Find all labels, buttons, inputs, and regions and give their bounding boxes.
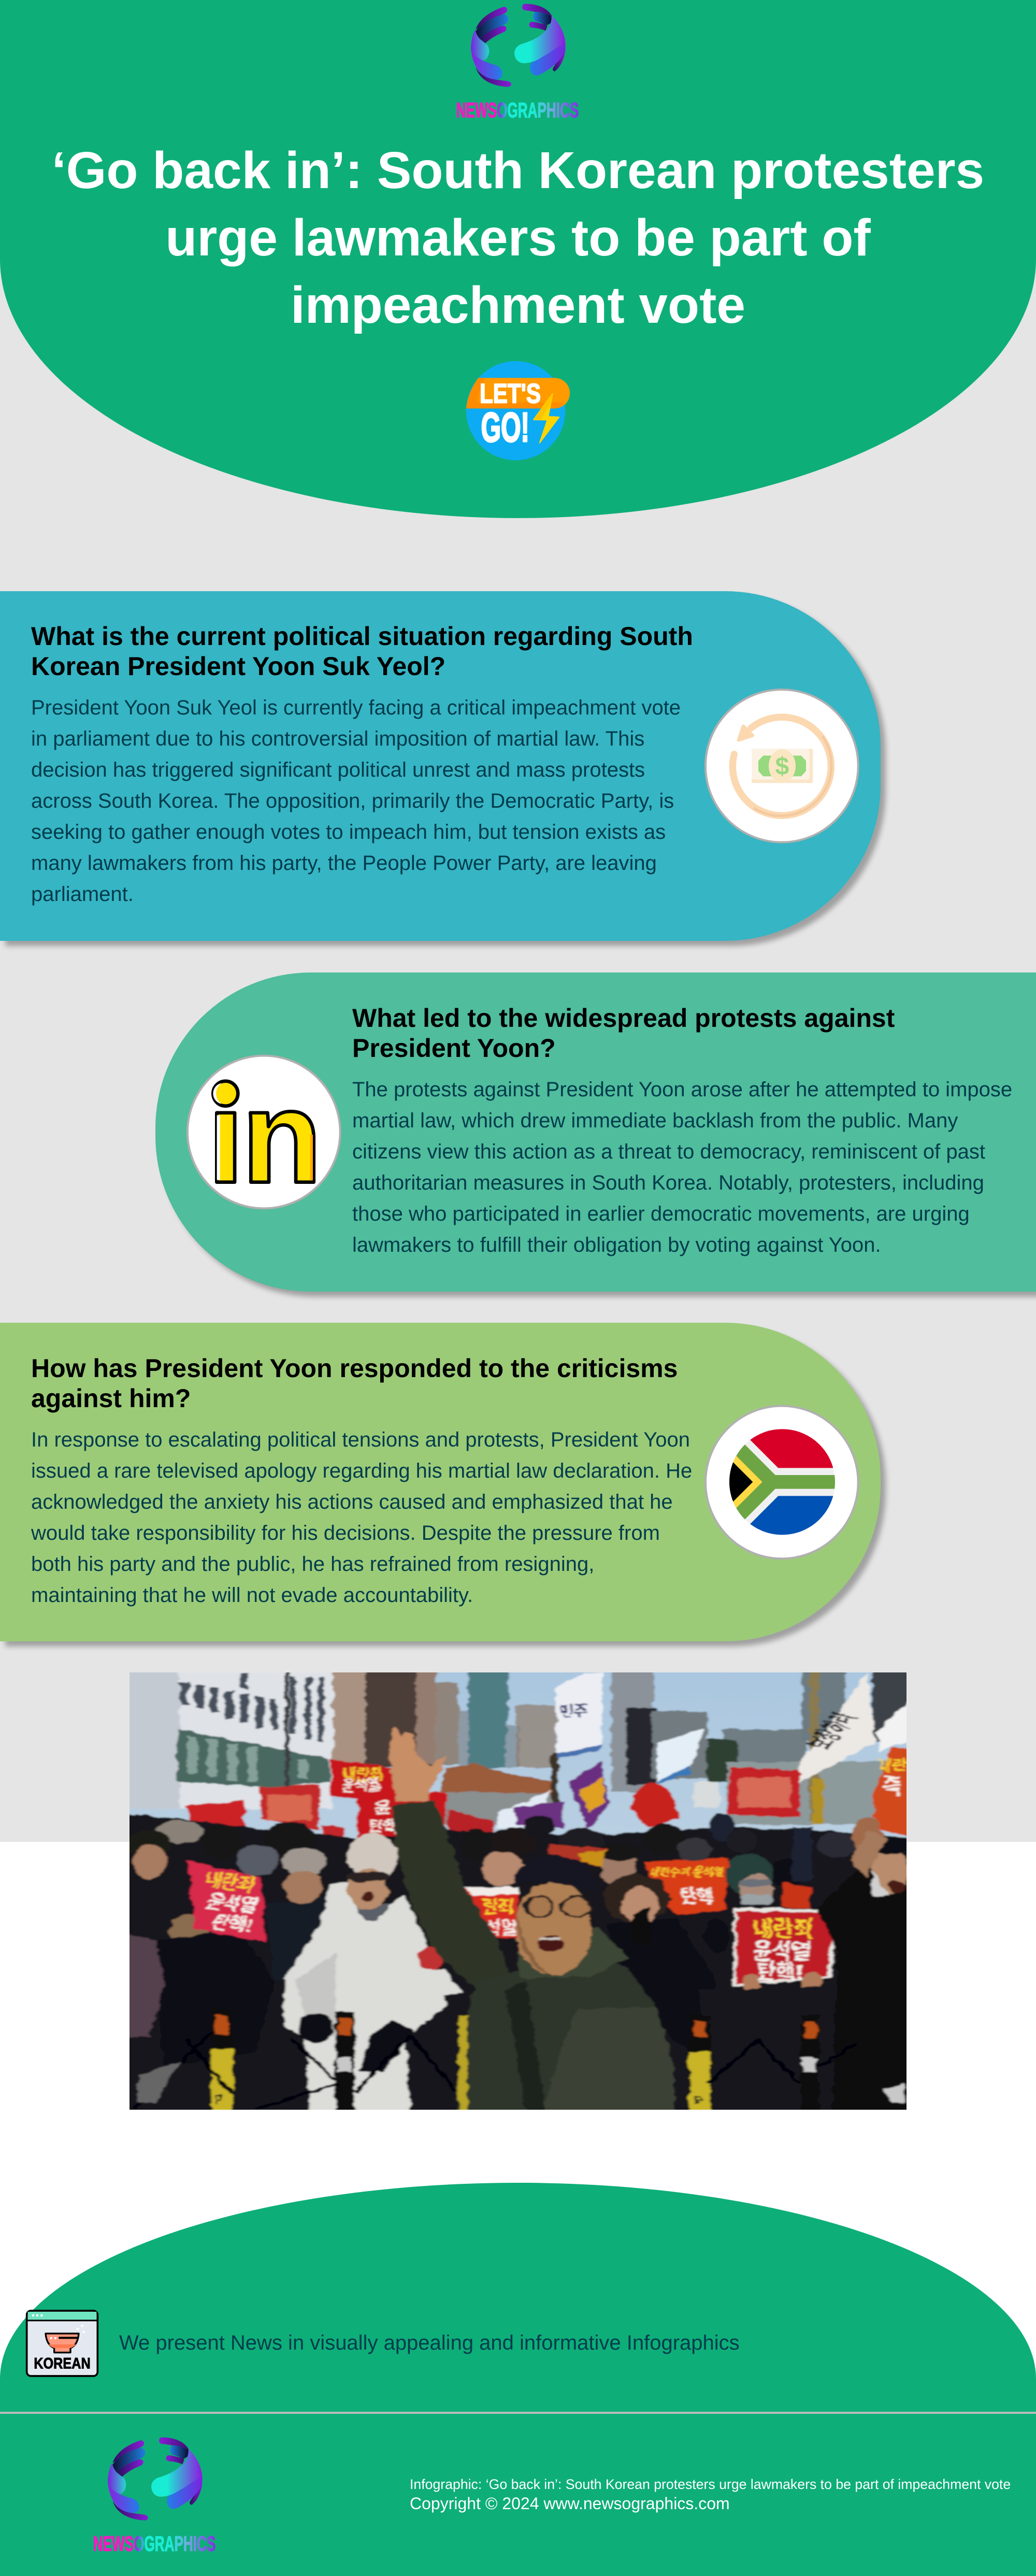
person with grey beanie <box>266 1847 328 1981</box>
heading: question 2: What led to the widespread protests against <box>352 1004 895 1033</box>
trees <box>441 1705 558 1813</box>
panel: Yoon's response <box>0 1323 881 1641</box>
text block: answer 1: many lawmakers from his party, the People Power Party, are leaving <box>31 852 657 875</box>
woman with dark hair <box>603 1874 717 2052</box>
title: urge lawmakers to be part of <box>165 209 871 267</box>
text block: answer 2: lawmakers to fulfill their obligation by voting against Yoon. <box>352 1234 881 1256</box>
person in white jacket <box>284 1833 445 2114</box>
text block: answer 2: martial law, which drew immediate backlash from the public. Many <box>352 1109 958 1132</box>
man at right edge <box>817 1830 913 2114</box>
background red signs: 즉 <box>883 1774 902 1798</box>
logo: Newsographics footer: NEWSOGRAPHICS <box>93 2532 215 2556</box>
logo: Newsographics header <box>456 4 579 122</box>
crowd mass <box>124 1813 913 2114</box>
barriers: P <box>694 2093 703 2108</box>
heading: question 2: President Yoon? <box>352 1034 556 1063</box>
heading: question 1: What is the current political situation regarding South <box>31 622 693 651</box>
flags: 민주 <box>560 1703 587 1720</box>
buildings <box>124 1668 913 1825</box>
icon: korean bowl: KOREAN <box>34 2355 91 2372</box>
background red signs <box>187 1748 913 1850</box>
text block: answer 1 <box>31 696 681 906</box>
logo: Newsographics footer <box>93 2437 215 2556</box>
icon: let's go badge <box>466 361 570 460</box>
footer panel: base <box>0 2412 1036 2576</box>
panel: what led to the protests <box>155 972 1036 1292</box>
text block: answer 1: seeking to gather enough votes to impeach him, but tension exists as <box>31 821 666 843</box>
icon: money cycle <box>704 689 859 843</box>
text block: answer 1: parliament. <box>31 883 134 906</box>
flags: 보장하라 <box>802 1710 864 1752</box>
heading: question 3: How has President Yoon responded to the criticisms <box>31 1354 678 1383</box>
photo: protesters with signs <box>130 1672 906 2110</box>
text block: answer 3 <box>31 1428 692 1607</box>
heading: question 1: Korean President Yoon Suk Yeol? <box>31 652 445 681</box>
barriers <box>132 2009 905 2114</box>
text block: answer 2: authoritarian measures in South Korea. Notably, protesters, including <box>352 1171 984 1194</box>
left person with pink sign: 내란죄 <box>202 1869 258 1896</box>
background red signs: 윤석열 <box>341 1777 380 1794</box>
title: impeachment vote <box>291 276 745 334</box>
heading: question 2 <box>352 1004 895 1063</box>
text block: answer 3: In response to escalating political tensions and protests, President Yoon <box>31 1428 690 1451</box>
text block: answer 3: issued a rare televised apology regarding his martial law declaration. He <box>31 1459 692 1482</box>
footer panel: curved band <box>0 2183 1036 2412</box>
red sign right: 윤석열 <box>753 1939 811 1964</box>
red sign right: 탄핵! <box>757 1960 802 1984</box>
left person with pink sign: 탄핵! <box>209 1911 255 1936</box>
text block: answer 1: across South Korea. The opposition, primarily the Democratic Party, is <box>31 790 674 812</box>
crowd heads <box>126 1813 882 1887</box>
main man with raised hand <box>391 1727 674 2114</box>
icon: in badge: i <box>208 1064 244 1210</box>
icon: korean bowl <box>26 2310 98 2377</box>
icon: in badge <box>186 1055 341 1210</box>
background red signs: 윤 <box>376 1799 390 1817</box>
red sign right: 내란죄 <box>753 1917 813 1942</box>
red sign right <box>698 1906 837 2084</box>
text block: answer 3: acknowledged the anxiety his actions caused and emphasized that he <box>31 1491 673 1513</box>
background red signs: 탄핵 <box>369 1818 397 1835</box>
orange sign <box>644 1858 812 1915</box>
icon: let's go badge: LET'S <box>480 379 541 409</box>
text block: answer 1: in parliament due to his controversial imposition of martial law. This <box>31 727 644 750</box>
logo: Newsographics header: NEWSOGRAPHICS <box>456 98 579 122</box>
panel: current political situation <box>0 591 881 941</box>
icon: money cycle: $ <box>775 752 789 780</box>
sign behind main man: 란죄 <box>483 1897 514 1917</box>
sign behind main man <box>418 1887 519 1998</box>
orange sign: 내란수괴 윤석열 <box>650 1866 724 1878</box>
person with hood <box>704 1854 773 1953</box>
text block: answer 3: both his party and the public, he has refrained from resigning, <box>31 1553 594 1576</box>
background red signs: 내란죄 <box>342 1766 384 1783</box>
text block: answer 1: decision has triggered significant political unrest and mass protests <box>31 759 645 781</box>
icon: let's go badge: GO! <box>481 404 529 450</box>
text block: answer 1: President Yoon Suk Yeol is currently facing a critical impeachment vote <box>31 696 681 719</box>
heading: question 1 <box>31 622 693 681</box>
sign behind main man: 석얼 <box>485 1919 516 1938</box>
barriers: P <box>215 2093 224 2108</box>
title: ‘Go back in’: South Korean protesters <box>52 141 984 199</box>
icon: in badge: n <box>242 1064 322 1210</box>
text block: answer 3: would take responsibility for his decisions. Despite the pressure from <box>31 1522 660 1544</box>
title <box>52 141 984 334</box>
header panel <box>0 0 1036 518</box>
text block: answer 3: maintaining that he will not evade accountability. <box>31 1584 473 1607</box>
left person with pink sign <box>124 1861 275 2066</box>
orange sign: 탄핵 <box>680 1886 713 1907</box>
copyright line: Copyright © 2024 www.newsographics.com <box>410 2494 730 2513</box>
left person with pink sign: 윤석열 <box>204 1891 261 1917</box>
background red signs: 내란 <box>879 1757 906 1774</box>
flags <box>496 1672 913 1831</box>
text block: answer 2: those who participated in earlier democratic movements, are urging <box>352 1203 970 1225</box>
text block: answer 2: citizens view this action as a threat to democracy, reminiscent of past <box>352 1140 985 1163</box>
text block: answer 2 <box>352 1078 1012 1256</box>
tagline: We present News in visually appealing and informative Infographics <box>119 2331 740 2354</box>
icon: round flag <box>704 1405 859 1559</box>
poles <box>285 1668 823 1825</box>
footer credit text <box>410 2477 1011 2513</box>
heading: question 3 <box>31 1354 678 1413</box>
text block: answer 2: The protests against President Yoon arose after he attempted to impose <box>352 1078 1012 1101</box>
heading: question 3: against him? <box>31 1384 191 1413</box>
infographic title line: Infographic: ‘Go back in’: South Korean protesters urge lawmakers to be part of impeachment vote <box>410 2477 1011 2492</box>
